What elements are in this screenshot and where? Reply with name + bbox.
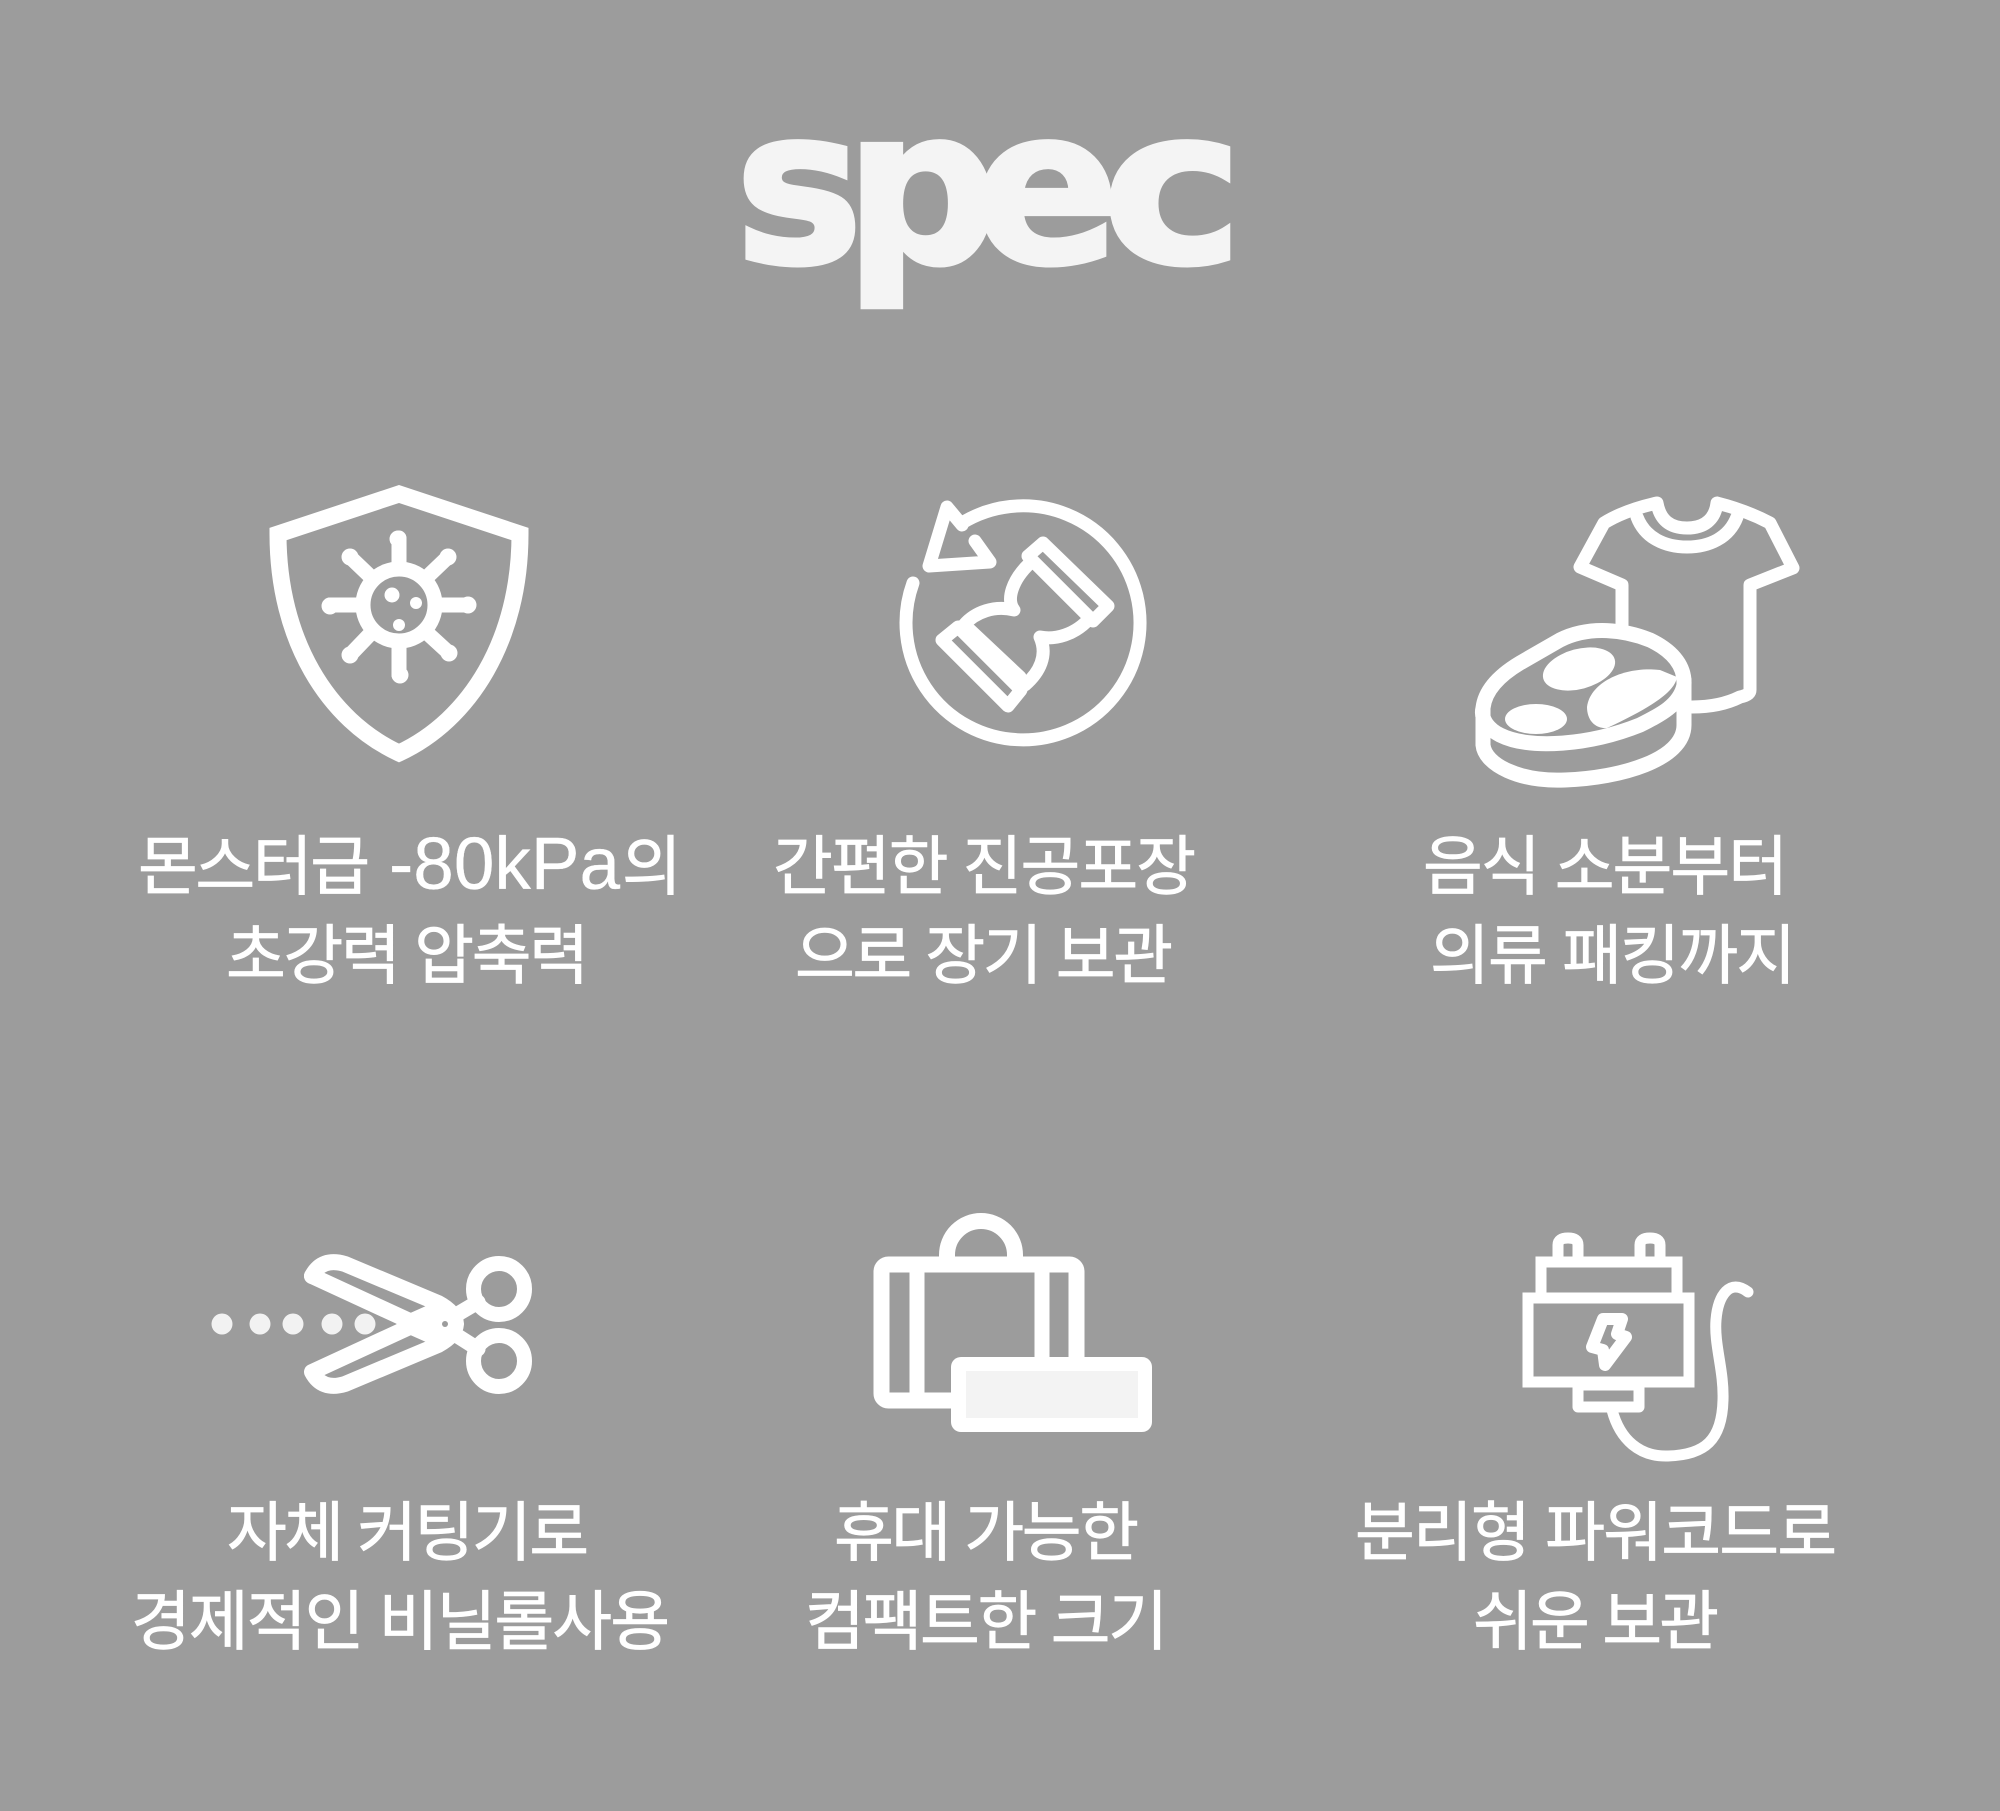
caption: long-term storage: 으로 장기 보관 bbox=[795, 919, 1173, 992]
caption: suction power: 몬스터급 bbox=[138, 830, 370, 903]
caption: portable size: 컴팩트한 크기 bbox=[805, 1585, 1168, 1658]
caption: built-in cutter: 경제적인 비닐롤사용 bbox=[131, 1585, 670, 1658]
icon: scissors with dotted line bbox=[212, 1262, 524, 1386]
panel: portable size bbox=[805, 1221, 1168, 1658]
caption: detachable power cord: 분리형 파워코드로 bbox=[1355, 1496, 1837, 1569]
icon: suitcase with device bbox=[882, 1221, 1152, 1432]
caption: built-in cutter: 자체 커팅기로 bbox=[227, 1496, 589, 1569]
icon: shield with virus bbox=[278, 494, 520, 753]
panel: detachable power cord bbox=[1355, 1238, 1837, 1658]
title: c bbox=[1102, 62, 1243, 313]
panel: long-term storage bbox=[773, 506, 1196, 992]
panel: built-in cutter bbox=[131, 1262, 670, 1658]
caption: suction power: 초강력 압축력 bbox=[226, 919, 589, 992]
caption: food and clothing: 의류 패킹까지 bbox=[1430, 919, 1796, 992]
icon: t-shirt and food plate bbox=[1482, 503, 1793, 780]
icon: charger with cord bbox=[1528, 1238, 1748, 1456]
caption: suction power: 의 bbox=[622, 830, 682, 903]
title: spe bbox=[735, 62, 1120, 313]
panel: food and clothing bbox=[1423, 503, 1796, 992]
caption: food and clothing: 음식 소분부터 bbox=[1423, 830, 1788, 903]
caption: detachable power cord: 쉬운 보관 bbox=[1473, 1585, 1719, 1658]
icon: hourglass in circular arrow bbox=[906, 506, 1140, 740]
panel: suction power bbox=[138, 494, 682, 992]
caption: portable size: 휴대 가능한 bbox=[834, 1496, 1139, 1569]
caption: suction power: -80kPa bbox=[389, 822, 621, 905]
caption: long-term storage: 간편한 진공포장 bbox=[773, 830, 1196, 903]
